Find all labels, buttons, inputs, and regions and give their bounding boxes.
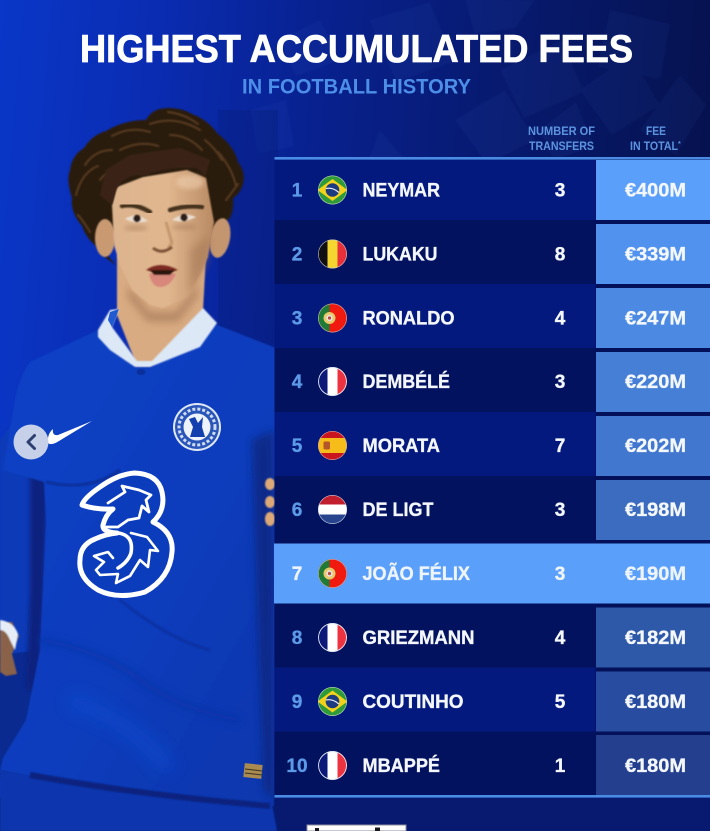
column header: fee in total: IN TOTAL: [630, 140, 678, 153]
row 3: 3: [292, 309, 302, 330]
row 7 highlighted: JOÃO FÉLIX: [362, 563, 470, 585]
row 4: €220M: [625, 372, 686, 393]
three logo: [80, 473, 172, 596]
ears: [95, 217, 233, 259]
row 8: 4: [555, 628, 566, 649]
row 1: €400M: [625, 181, 686, 202]
row 2: €339M: [625, 245, 686, 266]
shirt folds: [30, 430, 274, 806]
hair back: [68, 108, 244, 265]
far arm: [0, 400, 50, 655]
hair curls: [76, 112, 238, 232]
row 1: NEYMAR: [362, 181, 440, 202]
column header: number of transfers: [528, 125, 595, 153]
mouth: [146, 265, 178, 287]
hair fringe: [100, 148, 210, 205]
row 2: [274, 220, 710, 284]
row 4: [274, 348, 710, 412]
row 7 highlighted: [274, 544, 710, 604]
row 5: MORATA: [362, 436, 440, 457]
row 6: 6: [292, 500, 302, 521]
neck shadow: [128, 285, 198, 322]
row 5: 5: [292, 436, 303, 457]
chelsea crest: [173, 403, 221, 451]
collar inside: [108, 309, 119, 327]
row 6: 3: [555, 500, 565, 521]
row 9: 5: [555, 692, 566, 713]
collar: [98, 308, 217, 367]
column header: number of transfers: TRANSFERS: [529, 140, 594, 153]
row 1: 1: [292, 181, 303, 202]
ranking table: [274, 157, 710, 798]
hand: [0, 620, 19, 676]
nike swoosh: [48, 421, 92, 444]
forehead highlight: [176, 175, 204, 189]
row 1: 3: [555, 181, 565, 202]
eyes: [125, 214, 196, 223]
fingers: [265, 478, 275, 526]
row 3: 4: [555, 309, 566, 330]
row 6: DE LIGT: [362, 500, 434, 521]
arm shadow: [26, 470, 48, 690]
button: [136, 369, 146, 375]
shorts: [0, 770, 277, 831]
row 6: €198M: [625, 500, 686, 521]
row 9: 9: [292, 692, 302, 713]
row 7 highlighted: €190M: [625, 564, 686, 585]
column header: fee in total: FEE: [646, 125, 666, 138]
row 4: DEMBÉLÉ: [362, 371, 450, 393]
row 10: MBAPPÉ: [362, 755, 440, 777]
row 3: €247M: [625, 309, 686, 330]
row 8: 8: [292, 628, 302, 649]
carousel back button: [14, 424, 48, 460]
row 3: RONALDO: [362, 309, 454, 330]
player photo: [0, 108, 277, 831]
row 2: 2: [292, 245, 302, 266]
neck: [117, 255, 206, 366]
cropped source logo box: [307, 825, 406, 831]
row 3: [274, 284, 710, 348]
row 1: [274, 160, 710, 220]
row 8: GRIEZMANN: [362, 628, 474, 649]
row 9: [274, 668, 710, 732]
row 5: 7: [555, 436, 565, 457]
badge: [243, 763, 263, 779]
row 4: 3: [555, 372, 565, 393]
row 9: COUTINHO: [362, 692, 464, 713]
row 5: [274, 412, 710, 476]
row 4: 4: [292, 372, 303, 393]
cheek shadow: [190, 235, 210, 295]
eye shadows: [124, 224, 196, 231]
row 8: [274, 604, 710, 668]
row 10: 1: [555, 756, 566, 777]
row 10: €180M: [625, 756, 686, 777]
eyebrows: [122, 205, 202, 212]
row 2: LUKAKU: [362, 245, 438, 266]
column header: number of transfers: NUMBER OF: [528, 125, 595, 138]
column header: fee in total: *: [678, 141, 681, 148]
row 6: [274, 476, 710, 544]
row 10: [274, 732, 710, 795]
subtitle: IN FOOTBALL HISTORY: [242, 76, 471, 98]
row 10: 10: [286, 756, 308, 777]
row 8: €182M: [625, 628, 686, 649]
row 7 highlighted: 3: [555, 564, 565, 585]
row 2: 8: [555, 245, 565, 266]
title: HIGHEST ACCUMULATED FEES: [80, 28, 633, 71]
nose: [153, 222, 172, 251]
row 7 highlighted: 7: [292, 564, 302, 585]
row 9: €180M: [625, 692, 686, 713]
shirt: [0, 325, 276, 806]
column header: fee in total: [630, 125, 681, 153]
face: [112, 170, 214, 308]
row 5: €202M: [625, 436, 686, 457]
